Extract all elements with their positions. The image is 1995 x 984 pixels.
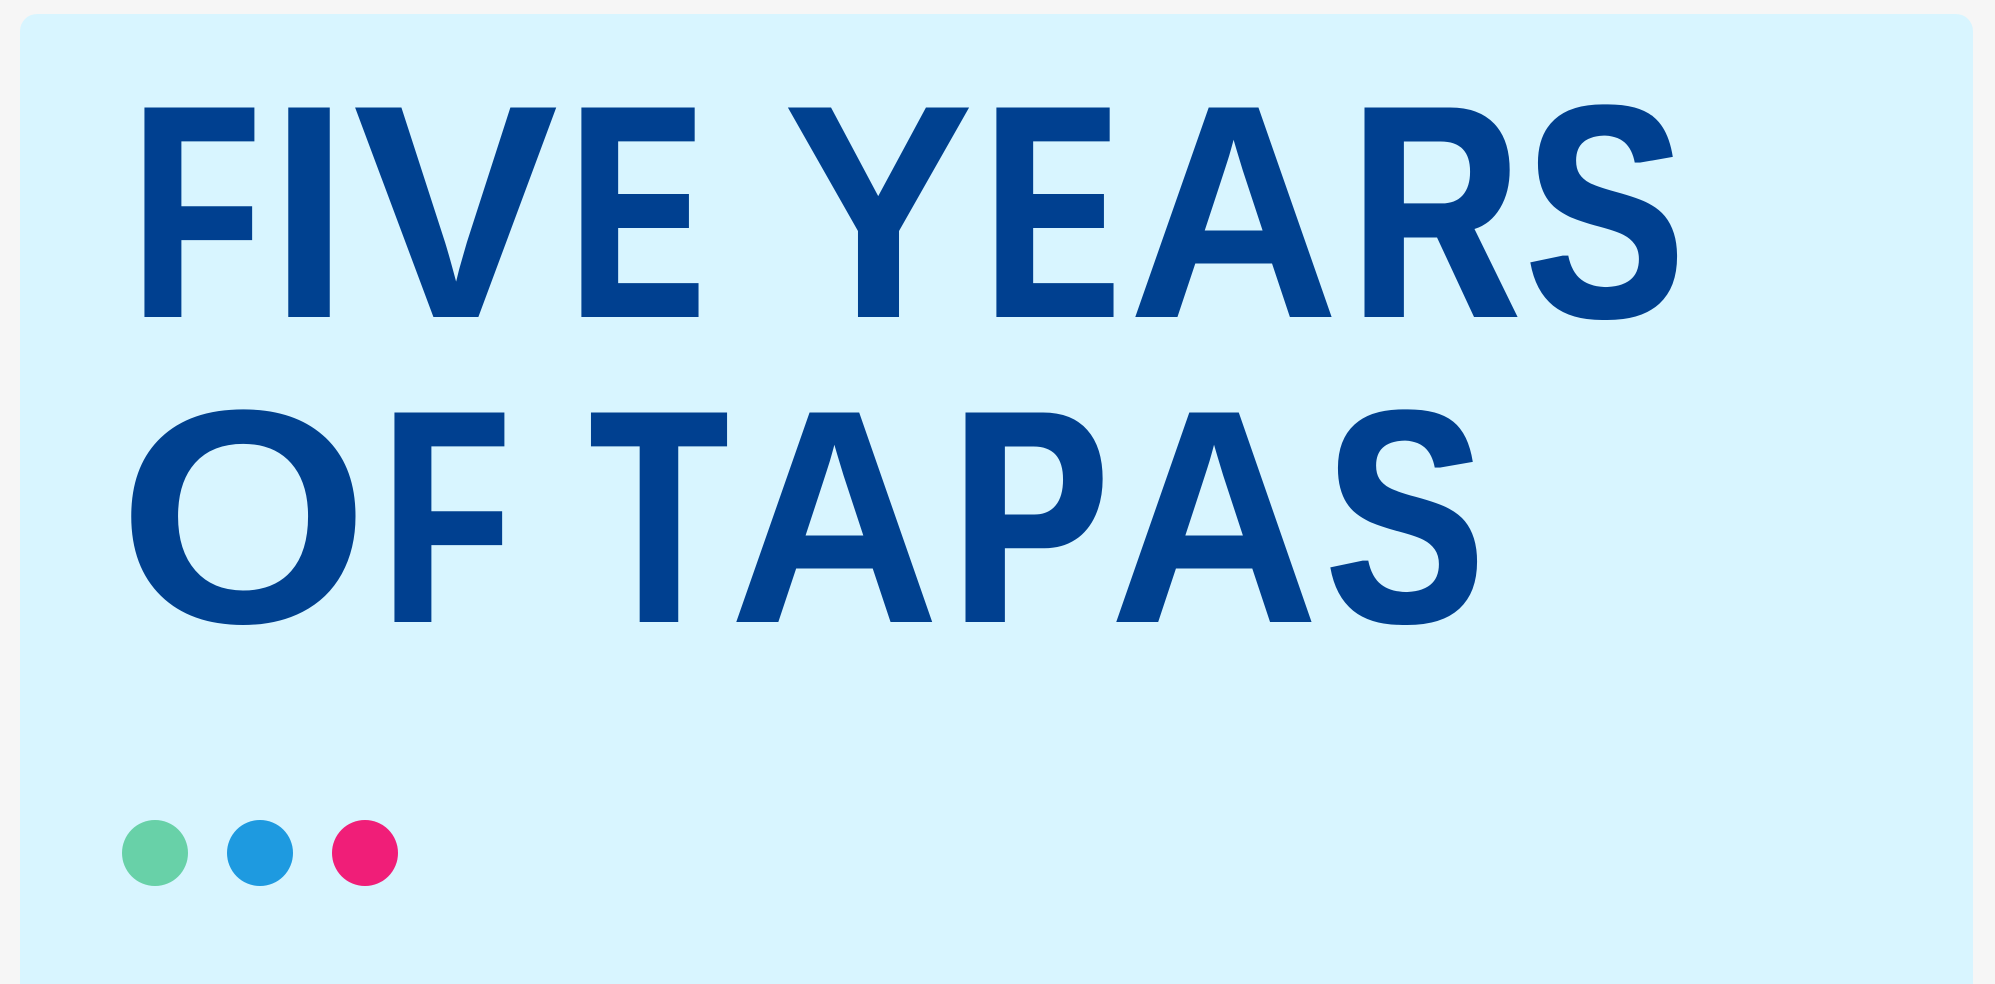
title line 1	[135, 40, 1684, 382]
icon: green dot	[122, 820, 188, 886]
icon: blue dot	[227, 820, 293, 886]
title line 1: A	[1128, 40, 1339, 382]
title line 2: F	[385, 346, 508, 687]
title line 1: I	[269, 40, 349, 382]
title line 1: S	[1526, 40, 1684, 382]
icon: pink dot	[332, 820, 398, 886]
title line 2: A	[1109, 346, 1319, 687]
title line 1: F	[135, 40, 257, 382]
title line 1: R	[1352, 40, 1519, 382]
title line 2: P	[952, 346, 1107, 687]
title line 2: A	[729, 346, 940, 687]
title line 1: E	[573, 40, 702, 382]
title line 2: T	[592, 346, 726, 687]
title line 2: S	[1326, 346, 1484, 687]
title line 1: E	[988, 40, 1116, 382]
title line 2: O	[118, 346, 369, 687]
title line 1: Y	[783, 40, 974, 382]
title line 1: V	[353, 40, 558, 382]
title line 2	[118, 346, 1484, 687]
